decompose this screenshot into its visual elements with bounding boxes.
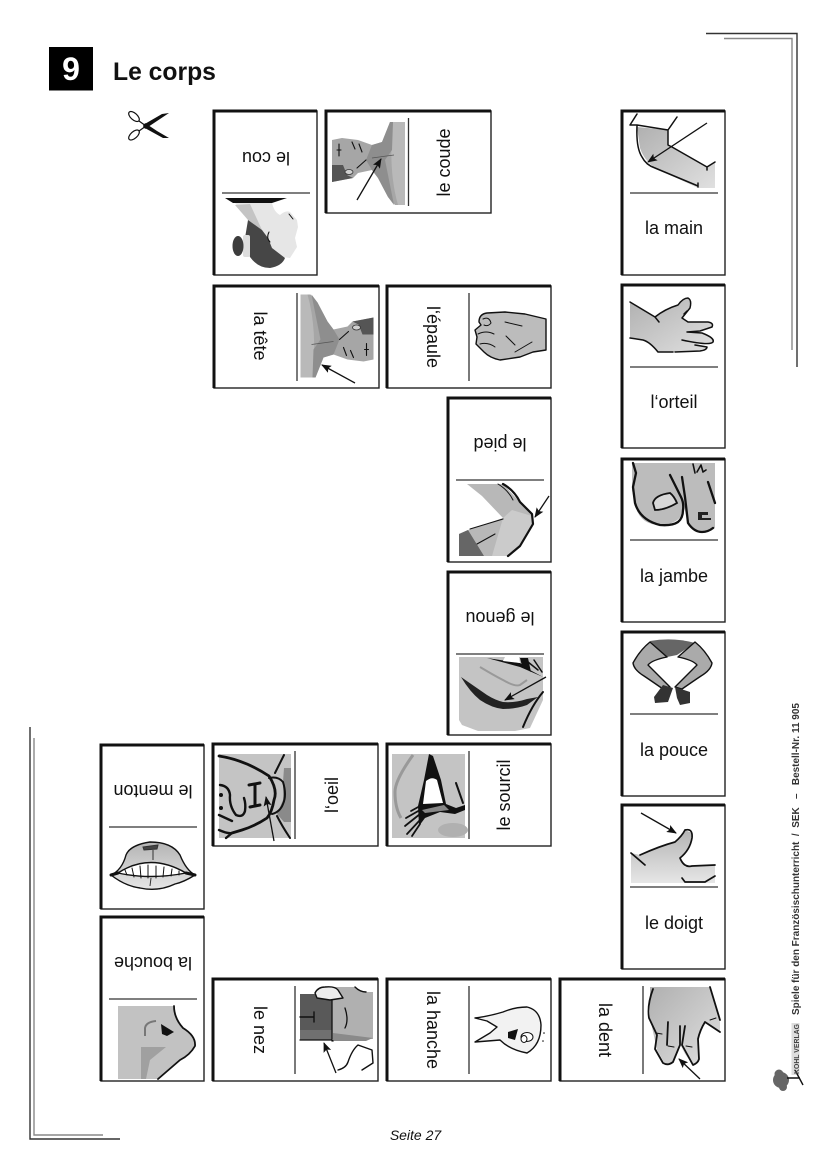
label: le coude: le coude (434, 128, 454, 197)
label: le cou: le cou (242, 148, 290, 168)
arrow (357, 159, 381, 200)
card: l'oeil (213, 744, 378, 846)
illustration: neck profile (300, 294, 374, 378)
card: l'épaule (387, 286, 551, 388)
card: le doigt (622, 805, 725, 969)
card: la pouce (622, 632, 725, 796)
frame: bottom left corner (30, 727, 120, 1139)
label: le doigt: le doigt (645, 913, 703, 933)
label: l'oeil: l‘oeil (322, 777, 342, 813)
card: le menton (101, 745, 204, 909)
card: le nez (213, 979, 378, 1081)
card: le coude (326, 111, 491, 213)
label: la bouche: la bouche (114, 953, 192, 973)
card: le pied (448, 398, 551, 562)
frame: top right corner (706, 34, 797, 367)
label: le pied: le pied (473, 434, 527, 454)
number badge: 9 (62, 51, 80, 87)
card: la main (622, 111, 725, 275)
illustration: bent knee (459, 484, 549, 556)
card: la hanche (387, 979, 551, 1081)
illustration: nose, upside down (118, 1006, 195, 1079)
illustration: fingers (648, 987, 720, 1079)
illustration: thumb (631, 813, 715, 883)
page number: Seite 27 (390, 1127, 442, 1143)
icon: scissors (127, 110, 169, 142)
illustration: neck profile (332, 122, 405, 205)
illustration: hand (630, 298, 713, 352)
label: la dent: la dent (595, 1003, 615, 1057)
label: la pouce: la pouce (640, 740, 708, 760)
label: l'épaule: l‘épaule (423, 306, 443, 368)
card: la dent (560, 979, 725, 1081)
label: la tête: la tête (250, 311, 270, 361)
illustration: eye close-up (392, 754, 468, 838)
card: la tête (214, 286, 379, 388)
card: l'orteil (622, 285, 725, 448)
label: le nez: le nez (250, 1006, 270, 1054)
illustration: toes (632, 463, 715, 532)
label: la jambe: la jambe (640, 566, 708, 586)
illustration: elbow (630, 114, 715, 188)
title: Le corps (113, 59, 216, 86)
illustration: hip (300, 987, 373, 1073)
logo: Kohl Verlag: KOHL VERLAG (792, 1024, 801, 1074)
arrow (322, 365, 355, 383)
label: l'orteil: l‘orteil (650, 392, 698, 412)
illustration: eyebrow close-up (459, 657, 546, 731)
illustration: neck, upside down (225, 198, 298, 268)
illustration: mouth, upside down (111, 842, 195, 889)
card: la jambe (622, 459, 725, 622)
illustration: tooth (475, 1007, 545, 1053)
illustration: kneeling legs (633, 639, 712, 705)
label: la main: la main (645, 218, 703, 238)
label: la hanche: la hanche (423, 991, 443, 1069)
card: le cou (214, 111, 317, 275)
label: le menton: le menton (113, 781, 193, 801)
illustration: ear close-up (219, 754, 291, 841)
label: le sourcil: le sourcil (494, 759, 514, 831)
card: le genou (448, 572, 551, 735)
illustration: foot (475, 312, 546, 360)
card: le sourcil (387, 744, 551, 846)
logo: Kohl Verlag (773, 1023, 803, 1091)
label: le genou: le genou (465, 608, 535, 628)
card: la bouche (101, 917, 204, 1081)
number badge (49, 47, 93, 90)
side text: Spiele für den Französischunterricht / SEK – Bestell-Nr. 11 905 (791, 703, 802, 1015)
